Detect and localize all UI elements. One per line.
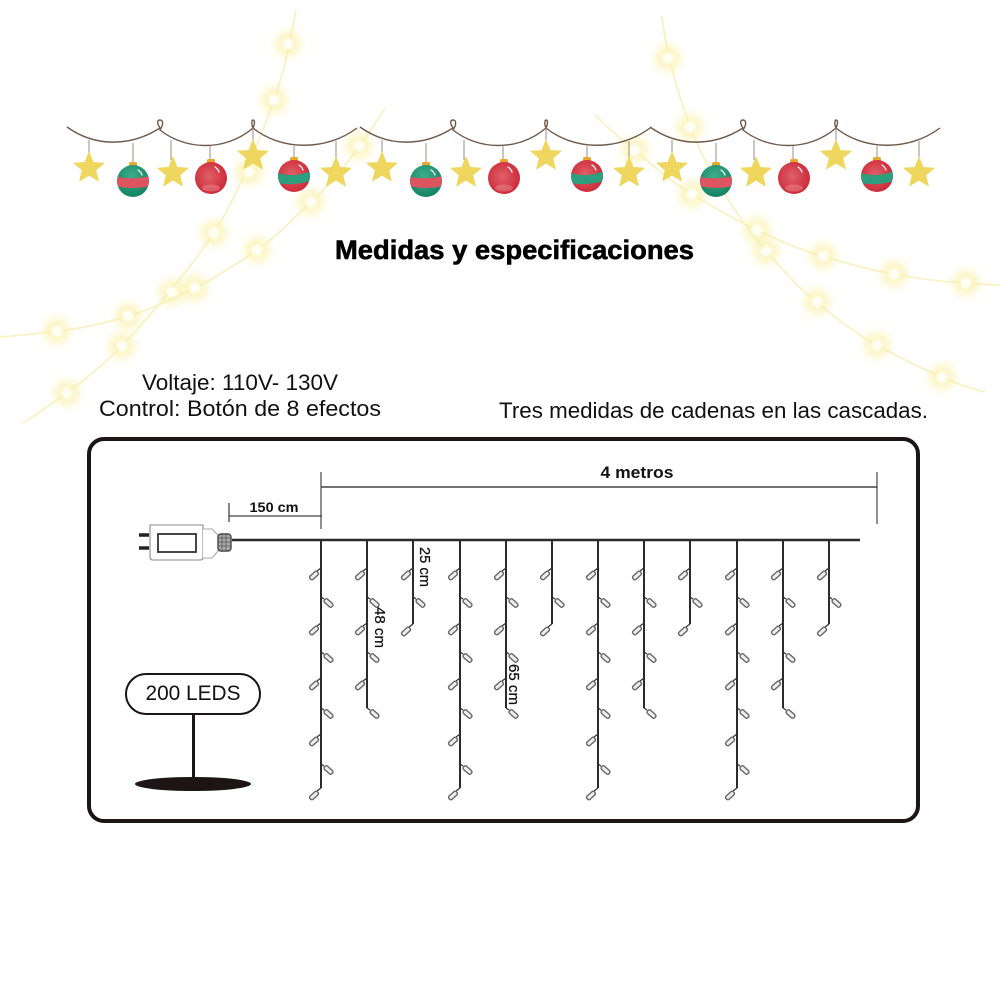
glowing light strings: right xyxy=(595,16,1000,392)
glowing light strings: left xyxy=(0,10,385,423)
dimension: 150 cm xyxy=(229,499,322,522)
specs text xyxy=(99,370,381,421)
label: 48 cm: 48 cm xyxy=(371,607,388,648)
sign: 200 LEDS xyxy=(126,674,260,791)
dimension: 4 metros xyxy=(321,464,877,529)
garland of stars and ornaments xyxy=(67,120,940,197)
title: Medidas y especificaciones xyxy=(335,235,694,265)
label: 25 cm: 25 cm xyxy=(416,547,433,587)
specs text: Control: Botón de 8 efectos xyxy=(99,396,381,421)
icon: controller plug xyxy=(139,525,231,560)
dimension: 4 metros: 4 metros xyxy=(600,464,674,482)
dimension: 150 cm: 150 cm xyxy=(250,499,298,515)
label: 65 cm: 65 cm xyxy=(505,664,522,705)
specs text: Voltaje: 110V- 130V xyxy=(142,370,338,395)
icicle strands xyxy=(309,540,842,800)
sign: 200 LEDS: 200 LEDS xyxy=(146,682,240,705)
panel: diagram frame xyxy=(89,439,918,821)
main wire xyxy=(232,539,860,541)
chain lengths note: Tres medidas de cadenas en las cascadas. xyxy=(499,398,928,423)
